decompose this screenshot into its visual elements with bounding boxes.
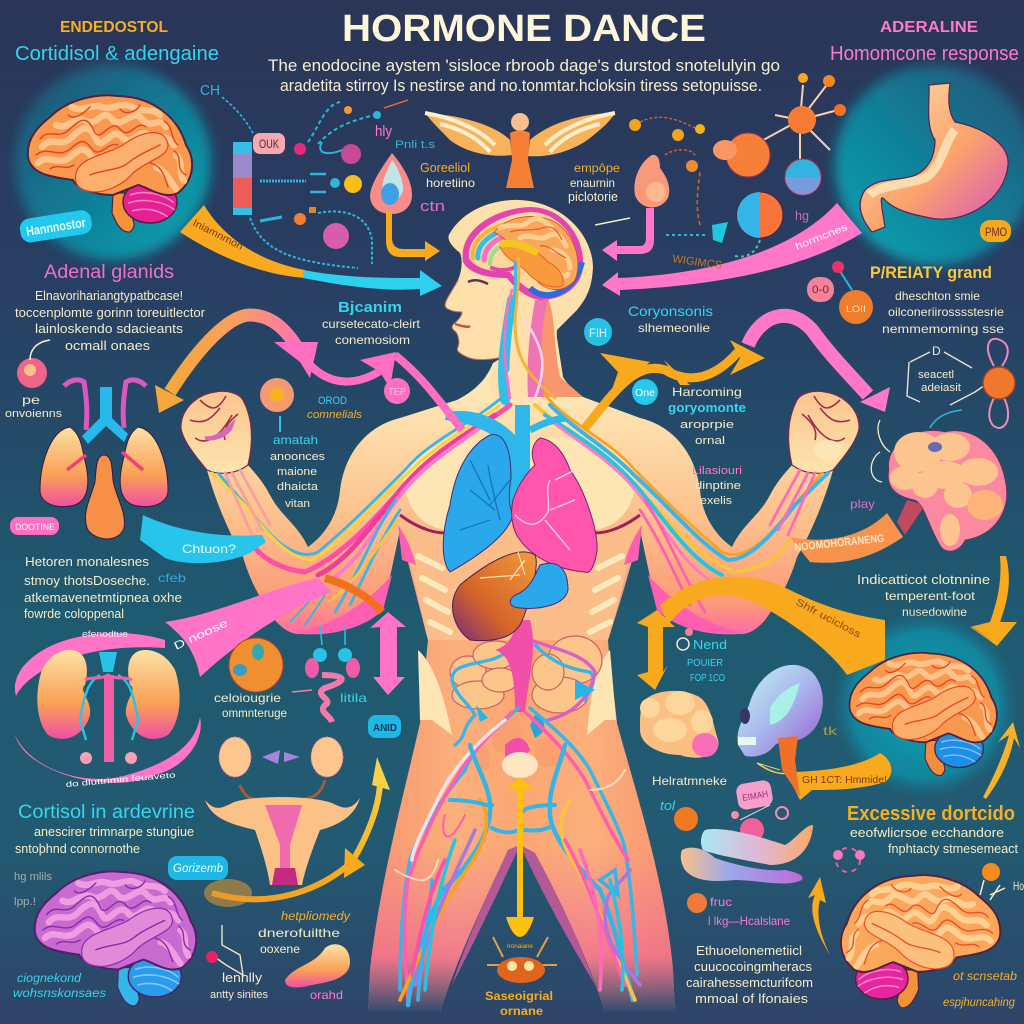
chemical: lower left: lennlly [222, 970, 263, 985]
body: torso with arms [207, 325, 833, 640]
text: hetoren paragraph: stmoy thotsDoseche. [24, 573, 150, 588]
text: coryonsonis: slhemeonlie [638, 321, 710, 335]
small badges [384, 318, 658, 405]
pill: dootine [10, 517, 59, 535]
icon: hormone drop with arrow to brain [370, 153, 440, 261]
panel: kidneys with pink ring: efenodtue [82, 629, 128, 639]
text: center-right labels: dinptine [695, 480, 741, 492]
text: excessive: fnphtacty stmesemeact [888, 841, 1018, 856]
lab diagram: hormone synthesis: Pnli t.s [395, 139, 436, 151]
text: bjcanim [322, 299, 421, 347]
arrow: bottom right curved [808, 877, 830, 955]
pill: gorizemb [168, 856, 228, 880]
label pill: hannnostor: Hannnostor [25, 215, 87, 239]
arrow: top right orange [970, 556, 1017, 646]
badge: PMO: PMO [985, 225, 1007, 239]
panel: purple brain: wohsnskonsaes [13, 986, 106, 1000]
panel text: pituitary gland: dheschton smie [895, 289, 980, 303]
pill: OUK [253, 133, 285, 154]
small badges: FIH [589, 326, 607, 340]
body: legs [368, 640, 675, 1012]
text: fruc labels: fruc [710, 895, 732, 909]
text: cortisol paragraph: Cortisol in ardevrine [18, 802, 195, 823]
text: hetpliomedy: hetpliomedy [281, 909, 351, 923]
chemical structure: seacetl [918, 369, 954, 381]
arrow: pink fan to body [165, 578, 382, 677]
badge: PMO [980, 220, 1011, 242]
icon: right pink brain cluster: play [850, 497, 875, 511]
chemical: lower left [206, 925, 268, 1001]
icon: orange cell: celoiougrie [214, 691, 281, 705]
panel: purple brain: hg mlils [14, 871, 52, 883]
text: center-left labels: maione [277, 466, 317, 478]
panel: adrenal lungs icon: pe [22, 393, 40, 407]
panel: purple brain [13, 871, 196, 1006]
subtitle text [268, 56, 780, 95]
chemical structure [907, 339, 1015, 428]
molecule: orange bond: 0-0 [812, 284, 829, 296]
text: indicatticot paragraph [857, 572, 990, 619]
text: hetoren paragraph: fowrde coloppenal [24, 606, 124, 621]
icon: limbs and balls [674, 807, 813, 884]
panel text: adenal glands [15, 262, 206, 353]
subtitle text: The enodocine aystem 'sisloce rbroob dage's durstod snotelulyin go [268, 56, 780, 75]
arrow: from excessive up right [983, 722, 1020, 799]
chemical structure: D [932, 344, 941, 358]
text: nend labels: Nend [693, 637, 727, 652]
panel: adrenal lungs icon: onvoienns [5, 408, 63, 420]
text: ethuoelonemetiicl paragraph: mmoal of lfonaies [695, 991, 809, 1006]
text: excessive: eeofwlicrsoe ecchandore [850, 825, 1004, 840]
panel text: adenal glands: lainloskendo sdacieants [35, 321, 184, 336]
heading: left top: Cortidisol & adengaine [15, 43, 219, 65]
panel text: adenal glands: ocmall onaes [65, 338, 151, 353]
panel: lower right brain [833, 613, 1017, 797]
arrow: brain to head yellow and blue [180, 205, 442, 296]
arrow: stomach to head pink: hormcnes [794, 222, 849, 253]
icon: left fist [181, 391, 251, 473]
banner: orange right: NOOMOHORANENG [794, 533, 885, 554]
text: ethuoelonemetiicl paragraph: cuucocoingmheracs [694, 959, 813, 974]
small badges: TEP [388, 387, 406, 398]
panel: top-right stomach [835, 65, 1024, 265]
icon: pink gut: litila [340, 691, 367, 705]
panel text: adenal glands: Adenal glanids [44, 262, 174, 283]
icon: winged figure [425, 113, 615, 188]
panel: bottom right brain: ot scnsetab [953, 969, 1017, 983]
molecule diagram: hg [795, 208, 809, 223]
label: empope [568, 161, 620, 204]
icon: pituitary with pink arrow [595, 155, 669, 261]
arrow: center yellow double [506, 777, 534, 937]
pill: gorizemb: Gorizemb [173, 861, 223, 875]
banner: orange right [790, 500, 925, 563]
organ: heart pink [512, 438, 597, 573]
text: hetoren paragraph [24, 554, 186, 621]
icon: skull [737, 665, 838, 797]
label: empope: enaurnin [570, 176, 615, 190]
text: center-left labels: anoonces [270, 451, 326, 463]
panel: kidneys with pink ring [15, 629, 201, 789]
text: center-right labels: goryomonte [668, 400, 746, 415]
text: excessive: Excessive dortcido [847, 803, 1015, 825]
text: hetpliomedy: ooxene [260, 942, 300, 956]
text: fruc labels [687, 893, 790, 928]
lab diagram: hormone synthesis: CH [200, 82, 220, 99]
text: nend labels: FOP 1CO [690, 673, 725, 684]
molecule diagram: WIGIMCS [672, 253, 723, 272]
chemical structure: adeiasit [921, 382, 961, 394]
text: hetoren paragraph: Hetoren monalesnes [25, 554, 150, 569]
pill: enimah: EIMAH [741, 789, 769, 803]
text: center-right labels: Lilasiouri [692, 465, 742, 477]
text: excessive [847, 803, 1018, 856]
text: cortisol paragraph: sntoþhnd connornothe [15, 841, 140, 856]
panel text: pituitary gland: nemmemoming sse [882, 322, 1004, 336]
callout: yellow band [757, 753, 891, 800]
label: empope: piclotorie [568, 189, 618, 204]
organs: aorta [445, 405, 565, 510]
molecule diagram [629, 73, 846, 272]
text: center-left labels: comnelials [307, 409, 363, 421]
text: hetoren paragraph: cfeb [158, 571, 186, 585]
arrow: brain to head yellow and blue: Iniamnmon [191, 218, 245, 253]
text: indicatticot paragraph: temperent-foot [885, 589, 976, 603]
test tube [233, 142, 252, 215]
icon: bottom gland: Saseoigrial [485, 989, 553, 1003]
text: bjcanim: conemosiom [335, 333, 410, 347]
icon: gland blob: orahd [310, 988, 343, 1002]
pill: ANID: ANID [373, 723, 397, 734]
heading: right top [830, 19, 1019, 65]
arrow: left wave [155, 315, 462, 430]
text: helratmneke: tol [660, 798, 676, 813]
arrow: stomach to head pink [602, 203, 862, 296]
vessels: right arm bundle [535, 395, 828, 612]
panel: adrenal lungs icon [5, 340, 168, 539]
text: center-left labels: dhaicta [277, 481, 319, 493]
arrow: orange double and arc: Shfr ucicloss [794, 597, 862, 640]
text: center-left labels [260, 378, 363, 510]
text: ethuoelonemetiicl paragraph [686, 943, 813, 1006]
icon: reproductive organs [205, 737, 360, 885]
lab diagram: hormone synthesis [200, 82, 436, 268]
organ: liver [453, 552, 536, 641]
pill: OUK: OUK [259, 137, 279, 151]
heading: right top: ADERALINE [880, 19, 978, 36]
label: empope: empôpe [574, 161, 620, 175]
text: nend labels [677, 628, 727, 684]
text: hetpliomedy: dnerofuilthe [258, 926, 340, 940]
banner: cyan [140, 515, 266, 563]
icon: peach blob cluster [640, 691, 718, 758]
icon: orange cell: ommnteruge [222, 706, 287, 720]
vessels: left arm bundle [212, 395, 510, 625]
icon: bottom gland [485, 937, 557, 1018]
panel: purple brain: ciognekond [17, 971, 81, 985]
text: center-right labels [668, 385, 746, 507]
panel text: adenal glands: Elnavorihariangtypatbcase! [35, 288, 183, 303]
text: coryonsonis: Coryonsonis [628, 303, 713, 319]
pill: enimah [731, 779, 788, 820]
icon: pink gut [292, 625, 367, 722]
label pill: hannnostor [18, 209, 93, 244]
organ: spleen blue [510, 563, 568, 608]
vessels: leg bundles [395, 708, 640, 1005]
arrow: pink fan to body: D noose [172, 617, 230, 653]
icon: bottom gland: ornane [500, 1004, 543, 1018]
organs: intestines [450, 620, 602, 778]
icon: small ring molecule [833, 848, 865, 872]
icon: right fist [789, 391, 859, 473]
text: ethuoelonemetiicl paragraph: cairahessemcturifcom [686, 975, 813, 990]
icon: gland blob [285, 944, 350, 1002]
text: cortisol paragraph: anescirer trimnarpe stungiue [34, 824, 194, 839]
body: head [445, 200, 593, 400]
panel text: pituitary gland [870, 263, 1004, 336]
panel text: pituitary gland: oilconeriirosssstesrie [888, 305, 1004, 319]
text: center-right labels: Harcoming [672, 385, 742, 399]
text: bjcanim: Bjcanim [338, 299, 402, 316]
panel text: pituitary gland: P/REIATY grand [870, 263, 992, 282]
text: center-left labels: OROD [318, 395, 347, 407]
text: center-right labels: ornal [695, 435, 725, 447]
icon: skull: tk [823, 724, 838, 738]
panel: top-left brain [15, 64, 211, 260]
molecule: orange bond [807, 261, 873, 324]
pill: ANID [368, 715, 401, 738]
heading: left top [15, 19, 219, 65]
text: center-left labels: amatah [273, 433, 318, 447]
icon: bottom gland: Ironaiane [507, 944, 534, 950]
text: helratmneke [652, 774, 727, 813]
text: ethuoelonemetiicl paragraph: Ethuoelonemetiicl [696, 943, 802, 958]
text: hetpliomedy [258, 909, 351, 956]
heading: left top: ENDEDOSTOL [60, 19, 168, 36]
text: center-right labels: aroprpie [680, 419, 734, 431]
organ: left lung blue [443, 435, 513, 572]
label: goreeliol: horetiino [426, 176, 475, 190]
banner: cyan: Chtuon? [182, 542, 236, 556]
text: coryonsonis [628, 303, 713, 335]
lab diagram: hormone synthesis: hly [375, 123, 392, 140]
label: goreeliol: ctn [420, 198, 445, 215]
title: HORMONE DANCE [342, 8, 706, 50]
pill: dootine: DOOTINE [15, 522, 55, 532]
callout: yellow band: GH 1CT: Hmmide! [802, 775, 887, 786]
text: center-right labels: exelis [700, 495, 733, 507]
panel: bottom right brain: espjhuncahing [943, 995, 1015, 1009]
arrow: right wave [585, 316, 890, 428]
label: goreeliol [420, 160, 475, 215]
panel: bottom right brain [841, 863, 1024, 1009]
arrow: yellow curve lower left [204, 757, 390, 907]
panel text: adenal glands: toccenplomte gorinn toreuitlector [15, 305, 206, 320]
subtitle text: aradetita stirroy Is nestirse and no.tonmtar.hcloksin tiress setopuisse. [280, 76, 762, 95]
label: goreeliol: Goreeliol [420, 160, 470, 175]
molecule: orange bond: LOII [846, 304, 866, 314]
text: helratmneke: Helratmneke [652, 774, 727, 788]
arrow: orange double and arc [637, 576, 885, 690]
arrow: pink double vertical [370, 612, 406, 695]
icon: orange cell [214, 638, 287, 720]
panel: purple brain: lpp.! [14, 896, 36, 908]
text: center-left labels: vitan [285, 498, 310, 510]
text: fruc labels: l lkg—Hcalslane [708, 914, 790, 928]
text: bjcanim: cursetecato-cleirt [322, 317, 421, 331]
text: nend labels: POUIER [687, 658, 723, 669]
text: cortisol paragraph [15, 802, 195, 856]
panel: kidneys with pink ring: do dluttrimin feuaveto [65, 770, 177, 789]
text: indicatticot paragraph: nusedowine [902, 605, 967, 619]
small badges: One [635, 388, 655, 399]
chemical: lower left: antty sinites [210, 989, 268, 1001]
text: indicatticot paragraph: Indicatticot clotnnine [857, 572, 990, 587]
text: hetoren paragraph: atkemavenetmtipnea oxhe [24, 590, 182, 605]
icon: right pink brain cluster [850, 410, 1007, 551]
